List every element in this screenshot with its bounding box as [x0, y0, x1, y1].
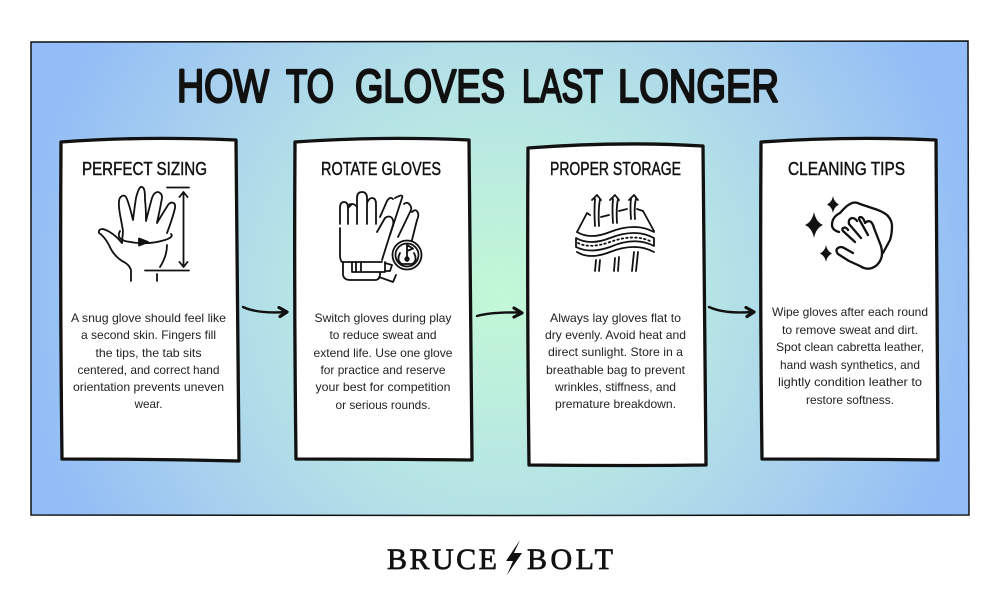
background panel	[30, 41, 969, 516]
title: TO	[286, 60, 334, 112]
body text: proper storage: dry evenly. Avoid heat and	[545, 328, 686, 342]
title	[177, 60, 779, 112]
arrow: sizing to rotate	[243, 307, 287, 316]
body text: proper storage: direct sunlight. Store in a	[548, 345, 683, 359]
body text: rotate gloves: for practice and reserve	[320, 363, 446, 377]
icon: wiping hand	[805, 196, 892, 269]
body text: perfect sizing	[71, 311, 226, 411]
body text: cleaning tips: restore softness.	[806, 393, 894, 407]
title: GLOVES	[355, 60, 505, 112]
body text: rotate gloves: Switch gloves during play	[314, 311, 452, 325]
heading: perfect sizing: PERFECT SIZING	[82, 159, 207, 179]
body text: cleaning tips	[772, 305, 928, 407]
heading: cleaning tips: CLEANING TIPS	[788, 159, 905, 179]
body text: proper storage: Always lay gloves flat to	[550, 311, 681, 325]
arrow: storage to cleaning	[709, 307, 754, 316]
heading: rotate gloves: ROTATE GLOVES	[321, 159, 441, 179]
body text: cleaning tips: Spot clean cabretta leather,	[776, 340, 924, 354]
logo: Bruce Bolt	[387, 540, 613, 576]
body text: perfect sizing: A snug glove should feel like	[71, 311, 226, 325]
body text: perfect sizing: a second skin. Fingers fill	[81, 328, 216, 342]
panel: perfect sizing	[61, 138, 239, 461]
body text: cleaning tips: to remove sweat and dirt.	[782, 323, 918, 337]
logo: Bruce Bolt: BRUCE	[387, 543, 497, 576]
cloth and hand	[832, 202, 892, 269]
panel: proper storage	[528, 144, 706, 465]
logo: Bruce Bolt: BOLT	[527, 543, 613, 576]
heading: proper storage: PROPER STORAGE	[550, 159, 681, 179]
body text: cleaning tips: hand wash synthetics, and	[780, 358, 920, 372]
body text: proper storage: breathable bag to prevent	[546, 363, 686, 377]
sparkles	[805, 196, 839, 262]
arrow: rotate to storage	[477, 308, 522, 317]
card outline	[61, 138, 239, 461]
body text: proper storage: wrinkles, stiffness, and	[554, 380, 676, 394]
body text: cleaning tips: lightly condition leather to	[778, 375, 922, 389]
body text: rotate gloves: to reduce sweat and	[330, 328, 436, 342]
card outline	[528, 144, 706, 465]
body text: perfect sizing: centered, and correct hand	[78, 363, 220, 377]
body text: rotate gloves: your best for competition	[316, 380, 450, 394]
title: LONGER	[618, 60, 779, 112]
card outline	[295, 138, 472, 460]
panel: rotate gloves	[295, 138, 472, 460]
body text: perfect sizing: the tips, the tab sits	[96, 346, 202, 360]
body text: perfect sizing: orientation prevents uneven	[73, 380, 224, 394]
body text: rotate gloves: extend life. Use one glove	[314, 346, 453, 360]
body text: proper storage	[545, 311, 686, 411]
title: HOW	[177, 60, 269, 112]
body text: proper storage: premature breakdown.	[555, 397, 676, 411]
body text: rotate gloves	[314, 311, 453, 412]
icon: golf gloves	[340, 192, 422, 282]
body text: rotate gloves: or serious rounds.	[336, 398, 430, 412]
panel: cleaning tips	[761, 138, 938, 460]
body text: cleaning tips: Wipe gloves after each round	[772, 305, 928, 319]
title: LAST	[522, 60, 603, 112]
card outline	[761, 138, 938, 460]
body text: perfect sizing: wear.	[134, 397, 162, 411]
icon: lightning bolt	[506, 540, 522, 575]
icon: hand measurement	[99, 187, 189, 281]
icon: breathable fabric	[576, 195, 654, 271]
